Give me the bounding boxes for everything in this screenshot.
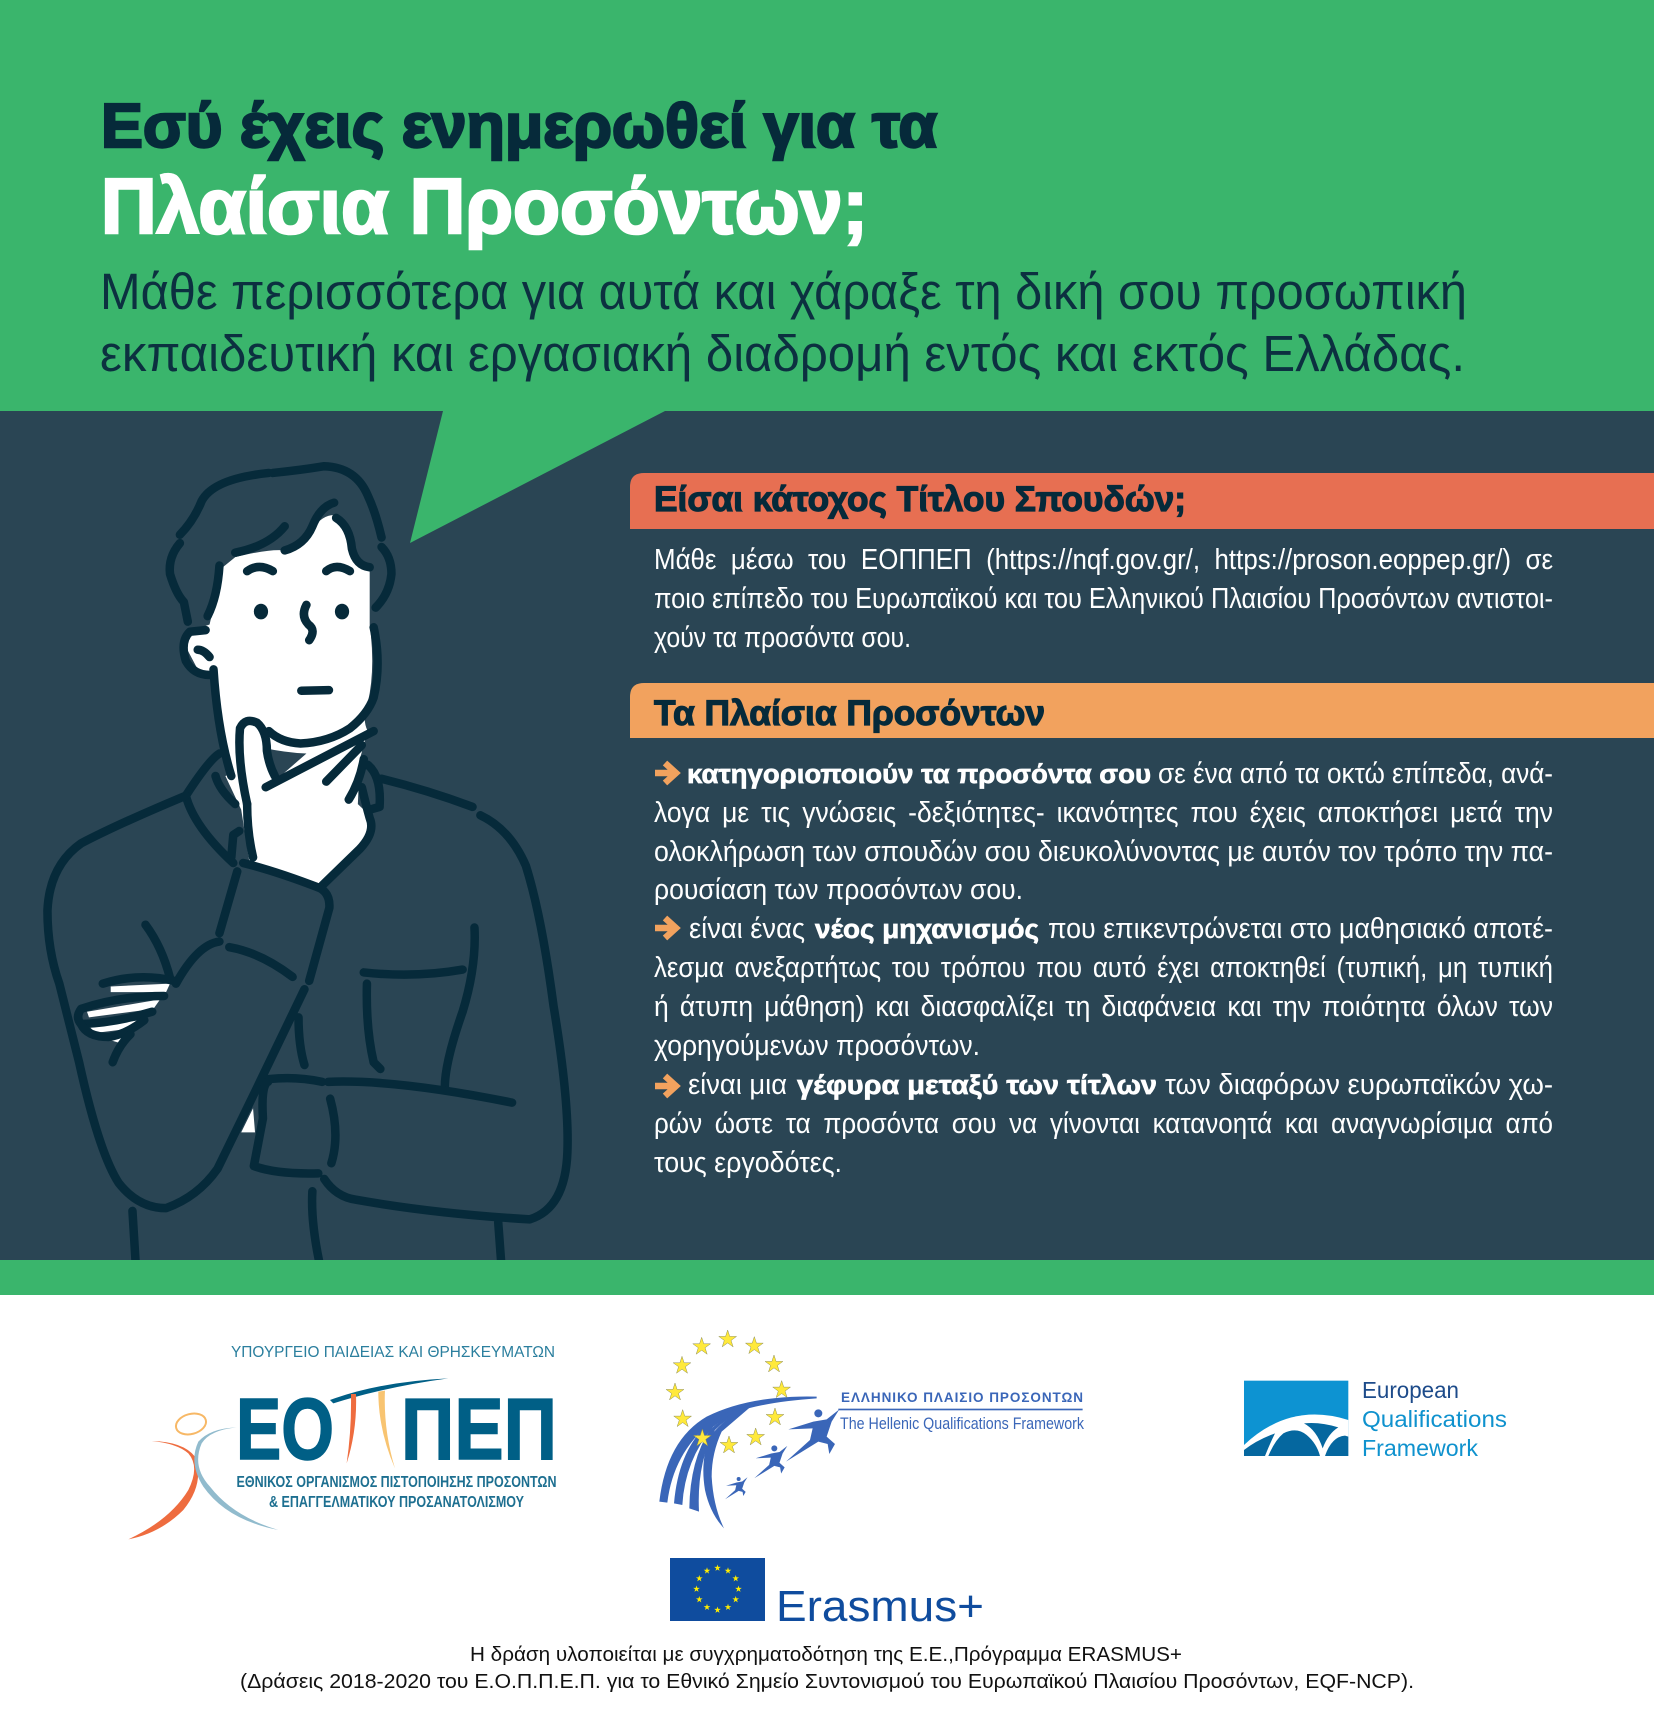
logo: EOPPEP xyxy=(128,1344,557,1539)
text block: point 2: λεσμα ανεξαρτήτως του τρόπου που αυτό έχει αποκτηθεί (τυπική, μη τυπική xyxy=(654,952,1553,984)
logo: European Qualifications Framework: European xyxy=(1362,1377,1459,1403)
text block: point 3: των διαφόρων ευρωπαϊκών χω- xyxy=(1165,1069,1553,1101)
footer text: Η δράση υλοποιείται με συγχρηματοδότηση της Ε.Ε.,Πρόγραμμα ERASMUS+ xyxy=(470,1644,1182,1666)
footer text: (Δράσεις 2018-2020 του Ε.Ο.Π.Π.Ε.Π. για το Εθνικό Σημείο Συντονισμού του Ευρωπαϊκού Πλαισίου Προσόντων, EQF-NCP). xyxy=(240,1671,1414,1693)
header panel xyxy=(0,0,1654,411)
text block: point 3: τους εργοδότες. xyxy=(654,1147,842,1179)
panel: degree holder xyxy=(630,473,1654,654)
dark main panel xyxy=(0,411,1654,1260)
title line 1: Εσύ έχεις ενημερωθεί για τα xyxy=(101,92,937,161)
panel: qualifications frameworks xyxy=(630,683,1654,1179)
text block: point 1: ολοκλήρωση των σπουδών σου διευκολύνοντας με αυτόν τον τρόπο την πα- xyxy=(654,836,1553,868)
text block: point 1: ρουσίαση των προσόντων σου. xyxy=(654,874,1023,906)
logo: EOPPEP: ΠΕΠ xyxy=(401,1381,557,1478)
heading bar: frameworks xyxy=(630,683,1654,738)
text block: point 2 xyxy=(654,913,1553,1062)
text block: degree holder: χούν τα προσόντα σου. xyxy=(654,622,911,654)
logo: Hellenic Qualifications Framework: The Hellenic Qualifications Framework xyxy=(840,1414,1084,1433)
ministry label: ΥΠΟΥΡΓΕΙΟ ΠΑΙΔΕΙΑΣ ΚΑΙ ΘΡΗΣΚΕΥΜΑΤΩΝ xyxy=(231,1344,555,1361)
bottom green band xyxy=(0,1260,1654,1295)
logo: EOPPEP: & ΕΠΑΓΓΕΛΜΑΤΙΚΟΥ ΠΡΟΣΑΝΑΤΟΛΙΣΜΟΥ xyxy=(269,1494,525,1511)
speech bubble tail xyxy=(410,411,665,543)
icon: arrow 1 xyxy=(655,763,676,783)
heading: frameworks: Τα Πλαίσια Προσόντων xyxy=(654,694,1045,733)
text block: point 2: ή άτυπη μάθηση) και διασφαλίζει τη διαφάνεια και την ποιότητα όλων των xyxy=(654,991,1553,1023)
text block: point 2: νέος μηχανισμός xyxy=(815,914,1039,944)
illustration: thinking man xyxy=(43,462,572,1260)
icon: arrow 2 xyxy=(655,918,676,938)
text block: point 1 xyxy=(654,758,1553,906)
footer text xyxy=(240,1644,1414,1693)
logo: Hellenic Qualifications Framework xyxy=(659,1330,1084,1528)
hand xyxy=(239,721,275,804)
heading bar: degree holder xyxy=(630,473,1654,529)
text block: point 3: είναι μια xyxy=(688,1069,787,1101)
text block: point 2: που επικεντρώνεται στο μαθησιακό αποτέ- xyxy=(1048,913,1553,945)
logo: EOPPEP: ΕΘΝΙΚΟΣ ΟΡΓΑΝΙΣΜΟΣ ΠΙΣΤΟΠΟΙΗΣΗΣ ΠΡΟΣΟΝΤΩΝ xyxy=(236,1474,556,1491)
logo: Erasmus+: Erasmus+ xyxy=(776,1582,984,1631)
text block: point 3: γέφυρα μεταξύ των τίτλων xyxy=(797,1070,1157,1100)
logo: European Qualifications Framework: Qualifications xyxy=(1362,1406,1507,1432)
heading: degree holder: Είσαι κάτοχος Τίτλου Σπουδών; xyxy=(654,480,1186,519)
text block: point 3 xyxy=(654,1069,1553,1179)
text block: point 1: σε ένα από τα οκτώ επίπεδα, ανά- xyxy=(1158,758,1553,790)
subtitle xyxy=(100,263,1467,382)
text block: degree holder xyxy=(654,544,1553,654)
logo: Erasmus+ xyxy=(670,1558,984,1631)
text block: point 2: χορηγούμενων προσόντων. xyxy=(654,1030,980,1062)
text block: point 3: ρών ώστε τα προσόντα σου να γίνονται κατανοητά και αναγνωρίσιμα από xyxy=(654,1108,1553,1140)
logo: European Qualifications Framework: Framework xyxy=(1362,1435,1478,1461)
icon: arrow 3 xyxy=(655,1076,676,1096)
title line 2: Πλαίσια Προσόντων; xyxy=(101,162,868,250)
logo: European Qualifications Framework xyxy=(1244,1377,1507,1461)
hair xyxy=(180,473,269,535)
subtitle: Μάθε περισσότερα για αυτά και χάραξε τη δική σου προσωπική xyxy=(100,263,1467,320)
logo: EOPPEP: ΕΟ xyxy=(236,1381,334,1478)
text block: point 1: λογα με τις γνώσεις -δεξιότητες- ικανότητες που έχεις αποκτήσει μετά την xyxy=(654,797,1553,829)
shirt xyxy=(186,754,233,863)
text block: degree holder: Μάθε μέσω του ΕΟΠΠΕΠ (https://nqf.gov.gr/, https://proson.eoppep.gr/) σε xyxy=(654,544,1553,576)
text block: point 2: είναι ένας xyxy=(689,913,805,945)
text block: point 1: κατηγοριοποιούν τα προσόντα σου xyxy=(687,759,1151,789)
subtitle: εκπαιδευτική και εργασιακή διαδρομή εντός και εκτός Ελλάδας. xyxy=(100,325,1465,382)
logo: Hellenic Qualifications Framework: ΕΛΛΗΝΙΚΟ ΠΛΑΙΣΙΟ ΠΡΟΣΟΝΤΩΝ xyxy=(841,1390,1083,1405)
text block: degree holder: ποιο επίπεδο του Ευρωπαϊκού και του Ελληνικού Πλαισίου Προσόντων αντιστοι- xyxy=(654,583,1553,615)
